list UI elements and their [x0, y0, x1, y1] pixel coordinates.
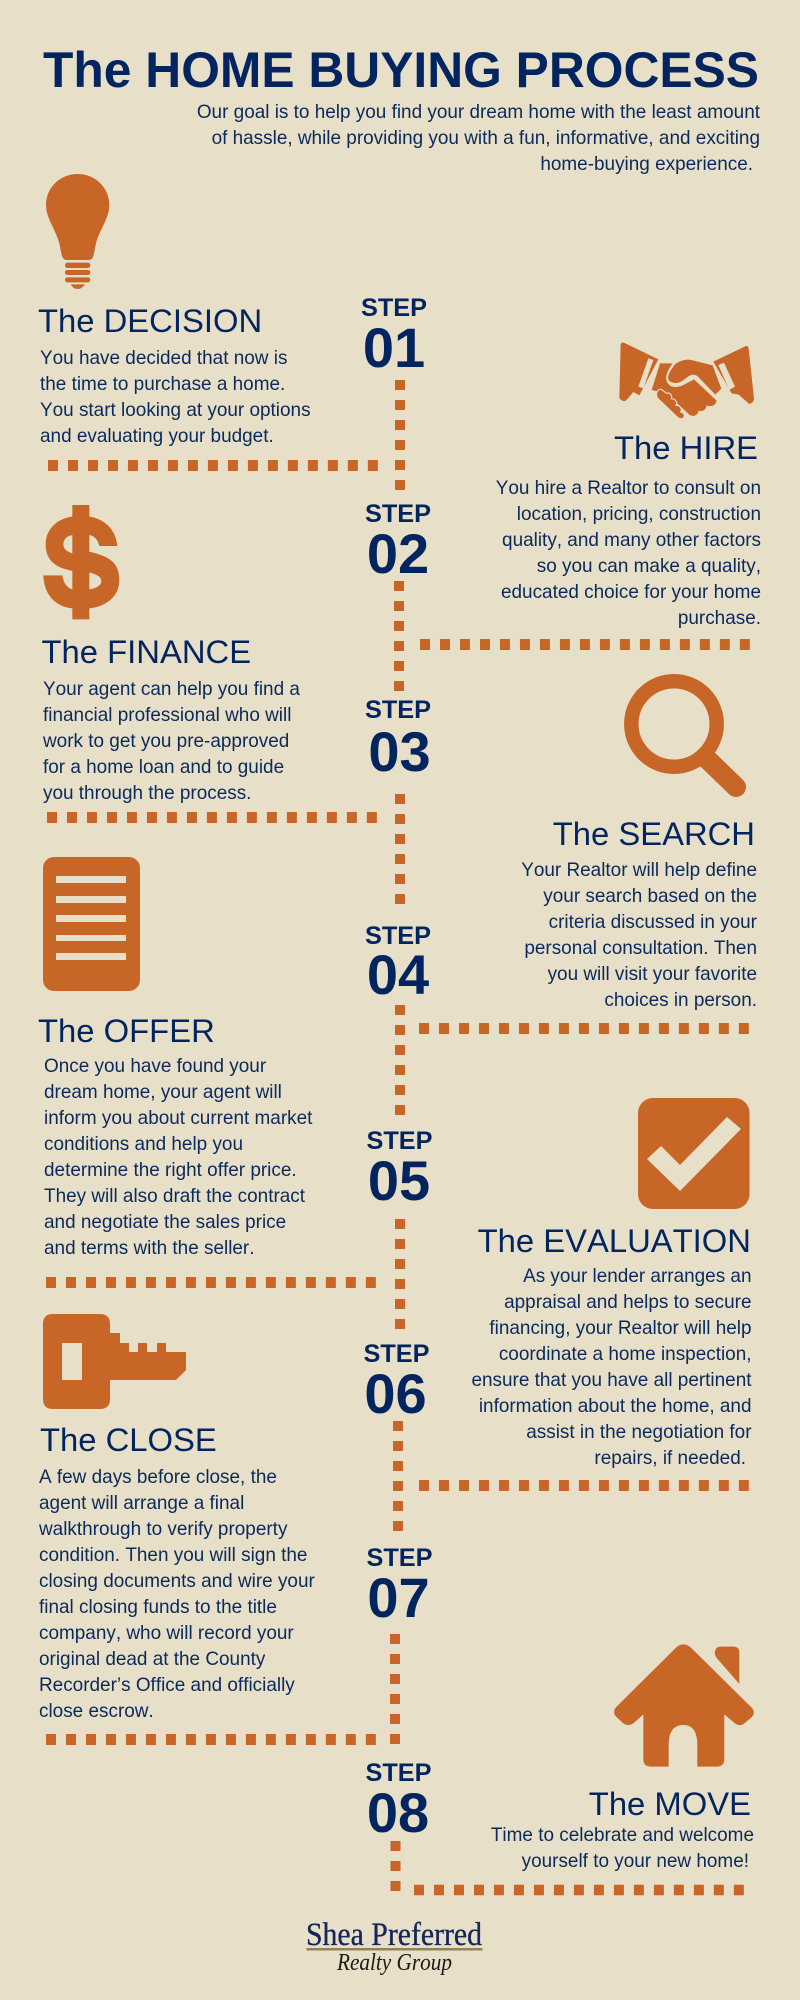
step 01 label: STEP — [361, 294, 427, 322]
text: search description: criteria discussed in your — [549, 912, 757, 933]
text: offer description: Once you have found your — [44, 1056, 266, 1077]
heading: the decision: The DECISION — [38, 302, 262, 339]
heading: the search: The SEARCH — [553, 815, 755, 852]
connector: step 5 dotted path — [46, 1219, 400, 1329]
text: move description: Time to celebrate and welcome — [491, 1825, 754, 1846]
connector: step 6 dotted path — [398, 1421, 751, 1531]
logo: Shea Preferred Realty Group — [306, 1917, 482, 1976]
text: search description: personal consultation. Then — [524, 938, 757, 959]
step 08 label: 08 — [367, 1781, 429, 1844]
connector: step 3 dotted path — [47, 794, 400, 905]
text: decision description: and evaluating your budget. — [40, 426, 274, 447]
text: hire description: purchase. — [678, 608, 761, 629]
text: hire description: so you can make a quality, — [537, 556, 761, 577]
step 03 label: 03 — [368, 720, 431, 783]
text: evaluation description: assist in the negotiation for — [526, 1422, 752, 1443]
icon: magnifying glass — [631, 681, 736, 787]
step 02 label: STEP — [365, 500, 431, 528]
step 06 label: STEP — [363, 1340, 430, 1368]
icon: document — [43, 857, 140, 991]
text: offer description: They will also draft the contract — [44, 1186, 306, 1207]
text: evaluation description: repairs, if needed. — [594, 1448, 746, 1469]
panel: step 4 the search — [521, 681, 757, 1011]
heading: the evaluation: The EVALUATION — [478, 1222, 751, 1259]
text: evaluation description: As your lender arranges an — [523, 1266, 752, 1287]
step 04 label: STEP — [365, 922, 431, 950]
text: finance description: Your agent can help you find a — [43, 679, 300, 700]
panel: step 5 the offer — [38, 857, 313, 1259]
connector: step 8 dotted path — [396, 1841, 746, 1892]
heading: the offer: The OFFER — [38, 1012, 215, 1049]
text: evaluation description: financing, your Realtor will help — [489, 1318, 752, 1339]
text: offer description: and terms with the seller. — [44, 1238, 255, 1259]
text: search description: choices in person. — [604, 990, 757, 1011]
text: close description: company, who will record your — [39, 1623, 294, 1644]
icon: house — [614, 1644, 754, 1767]
intro text: of hassle, while providing you with a fun, informative, and exciting — [212, 128, 760, 149]
text: close description: close escrow. — [39, 1701, 154, 1722]
logo: Shea Preferred Realty Group: Realty Group — [336, 1950, 452, 1976]
text: search description: Your Realtor will help define — [521, 860, 757, 881]
step 07 label: STEP — [366, 1544, 433, 1572]
text: evaluation description: ensure that you have all pertinent — [471, 1370, 752, 1391]
step 08 label: STEP — [365, 1759, 432, 1787]
logo: Shea Preferred Realty Group: Shea Preferred — [306, 1917, 482, 1953]
icon: check box — [638, 1098, 750, 1209]
text: decision description: You have decided that now is — [40, 348, 287, 369]
icon: light bulb — [46, 174, 109, 289]
step 02 label: 02 — [367, 522, 429, 585]
text: evaluation description: information about the home, and — [479, 1396, 752, 1417]
connector: step 7 dotted path — [46, 1634, 395, 1744]
connector: step 2 dotted path — [399, 581, 752, 691]
text: offer description: and negotiate the sales price — [44, 1212, 286, 1233]
heading: the finance: The FINANCE — [42, 633, 251, 670]
text: close description: original dead at the County — [39, 1649, 266, 1670]
text: hire description: You hire a Realtor to consult on — [496, 478, 761, 499]
text: search description: your search based on the — [543, 886, 757, 907]
heading: the hire: The HIRE — [614, 429, 758, 466]
step 01 label: 01 — [363, 316, 425, 379]
text: hire description: location, pricing, construction — [517, 504, 761, 525]
text: close description: closing documents and wire your — [39, 1571, 315, 1592]
step 06 label: 06 — [364, 1362, 427, 1425]
text: offer description: dream home, your agent will — [44, 1082, 282, 1103]
text: offer description: inform you about current market — [44, 1108, 313, 1129]
text: close description: condition. Then you will sign the — [39, 1545, 307, 1566]
panel: step 8 the move — [491, 1644, 754, 1872]
heading: the move: The MOVE — [589, 1785, 751, 1822]
panel: step 3 the finance — [42, 505, 300, 804]
text: close description: A few days before close, the — [39, 1467, 277, 1488]
step 01 label — [361, 294, 427, 379]
step 07 label: 07 — [367, 1566, 430, 1629]
text: move description: yourself to your new home! — [522, 1851, 749, 1872]
text: evaluation description: appraisal and helps to secure — [504, 1292, 752, 1313]
connector: step 1 dotted path — [48, 380, 400, 490]
step 05 label: 05 — [368, 1149, 430, 1212]
text: hire description: educated choice for your home — [501, 582, 761, 603]
panel: step 6 the evaluation — [471, 1098, 752, 1469]
step 03 label: STEP — [365, 696, 431, 724]
text: search description: you will visit your favorite — [548, 964, 757, 985]
text: offer description: conditions and help you — [44, 1134, 243, 1155]
step 03 label — [365, 696, 431, 783]
step 04 label: 04 — [367, 943, 429, 1006]
text: close description: walkthrough to verify property — [38, 1519, 288, 1540]
step 07 label — [366, 1544, 433, 1629]
text: close description: Recorder’s Office and officially — [39, 1675, 295, 1696]
heading: the close: The CLOSE — [40, 1421, 217, 1458]
text: finance description: financial professional who will — [43, 705, 291, 726]
icon: dollar sign — [43, 505, 119, 619]
panel: step 2 the hire — [496, 342, 761, 629]
panel: step 1 the decision — [38, 174, 311, 447]
icon: handshake — [619, 342, 754, 419]
step 06 label — [363, 1340, 430, 1425]
text: close description: agent will arrange a final — [39, 1493, 244, 1514]
text: decision description: You start looking at your options — [40, 400, 311, 421]
text: finance description: for a home loan and to guide — [43, 757, 284, 778]
icon: key — [43, 1314, 186, 1409]
panel: step 7 the close — [38, 1314, 315, 1722]
text: evaluation description: coordinate a home inspection, — [499, 1344, 752, 1365]
step 02 label — [365, 500, 431, 585]
step 08 label — [365, 1759, 432, 1844]
text: offer description: determine the right offer price. — [44, 1160, 297, 1181]
text: finance description: you through the process. — [43, 783, 251, 804]
step 05 label: STEP — [366, 1127, 433, 1155]
text: finance description: work to get you pre-approved — [42, 731, 289, 752]
intro text: home-buying experience. — [540, 154, 753, 175]
title: The HOME BUYING PROCESS — [43, 42, 759, 98]
step 05 label — [366, 1127, 433, 1212]
connector: step 4 dotted path — [400, 1005, 751, 1116]
text: close description: final closing funds to the title — [39, 1597, 277, 1618]
intro text: Our goal is to help you find your dream home with the least amount — [197, 102, 761, 123]
text: hire description: quality, and many other factors — [502, 530, 761, 551]
text: decision description: the time to purchase a home. — [40, 374, 285, 395]
